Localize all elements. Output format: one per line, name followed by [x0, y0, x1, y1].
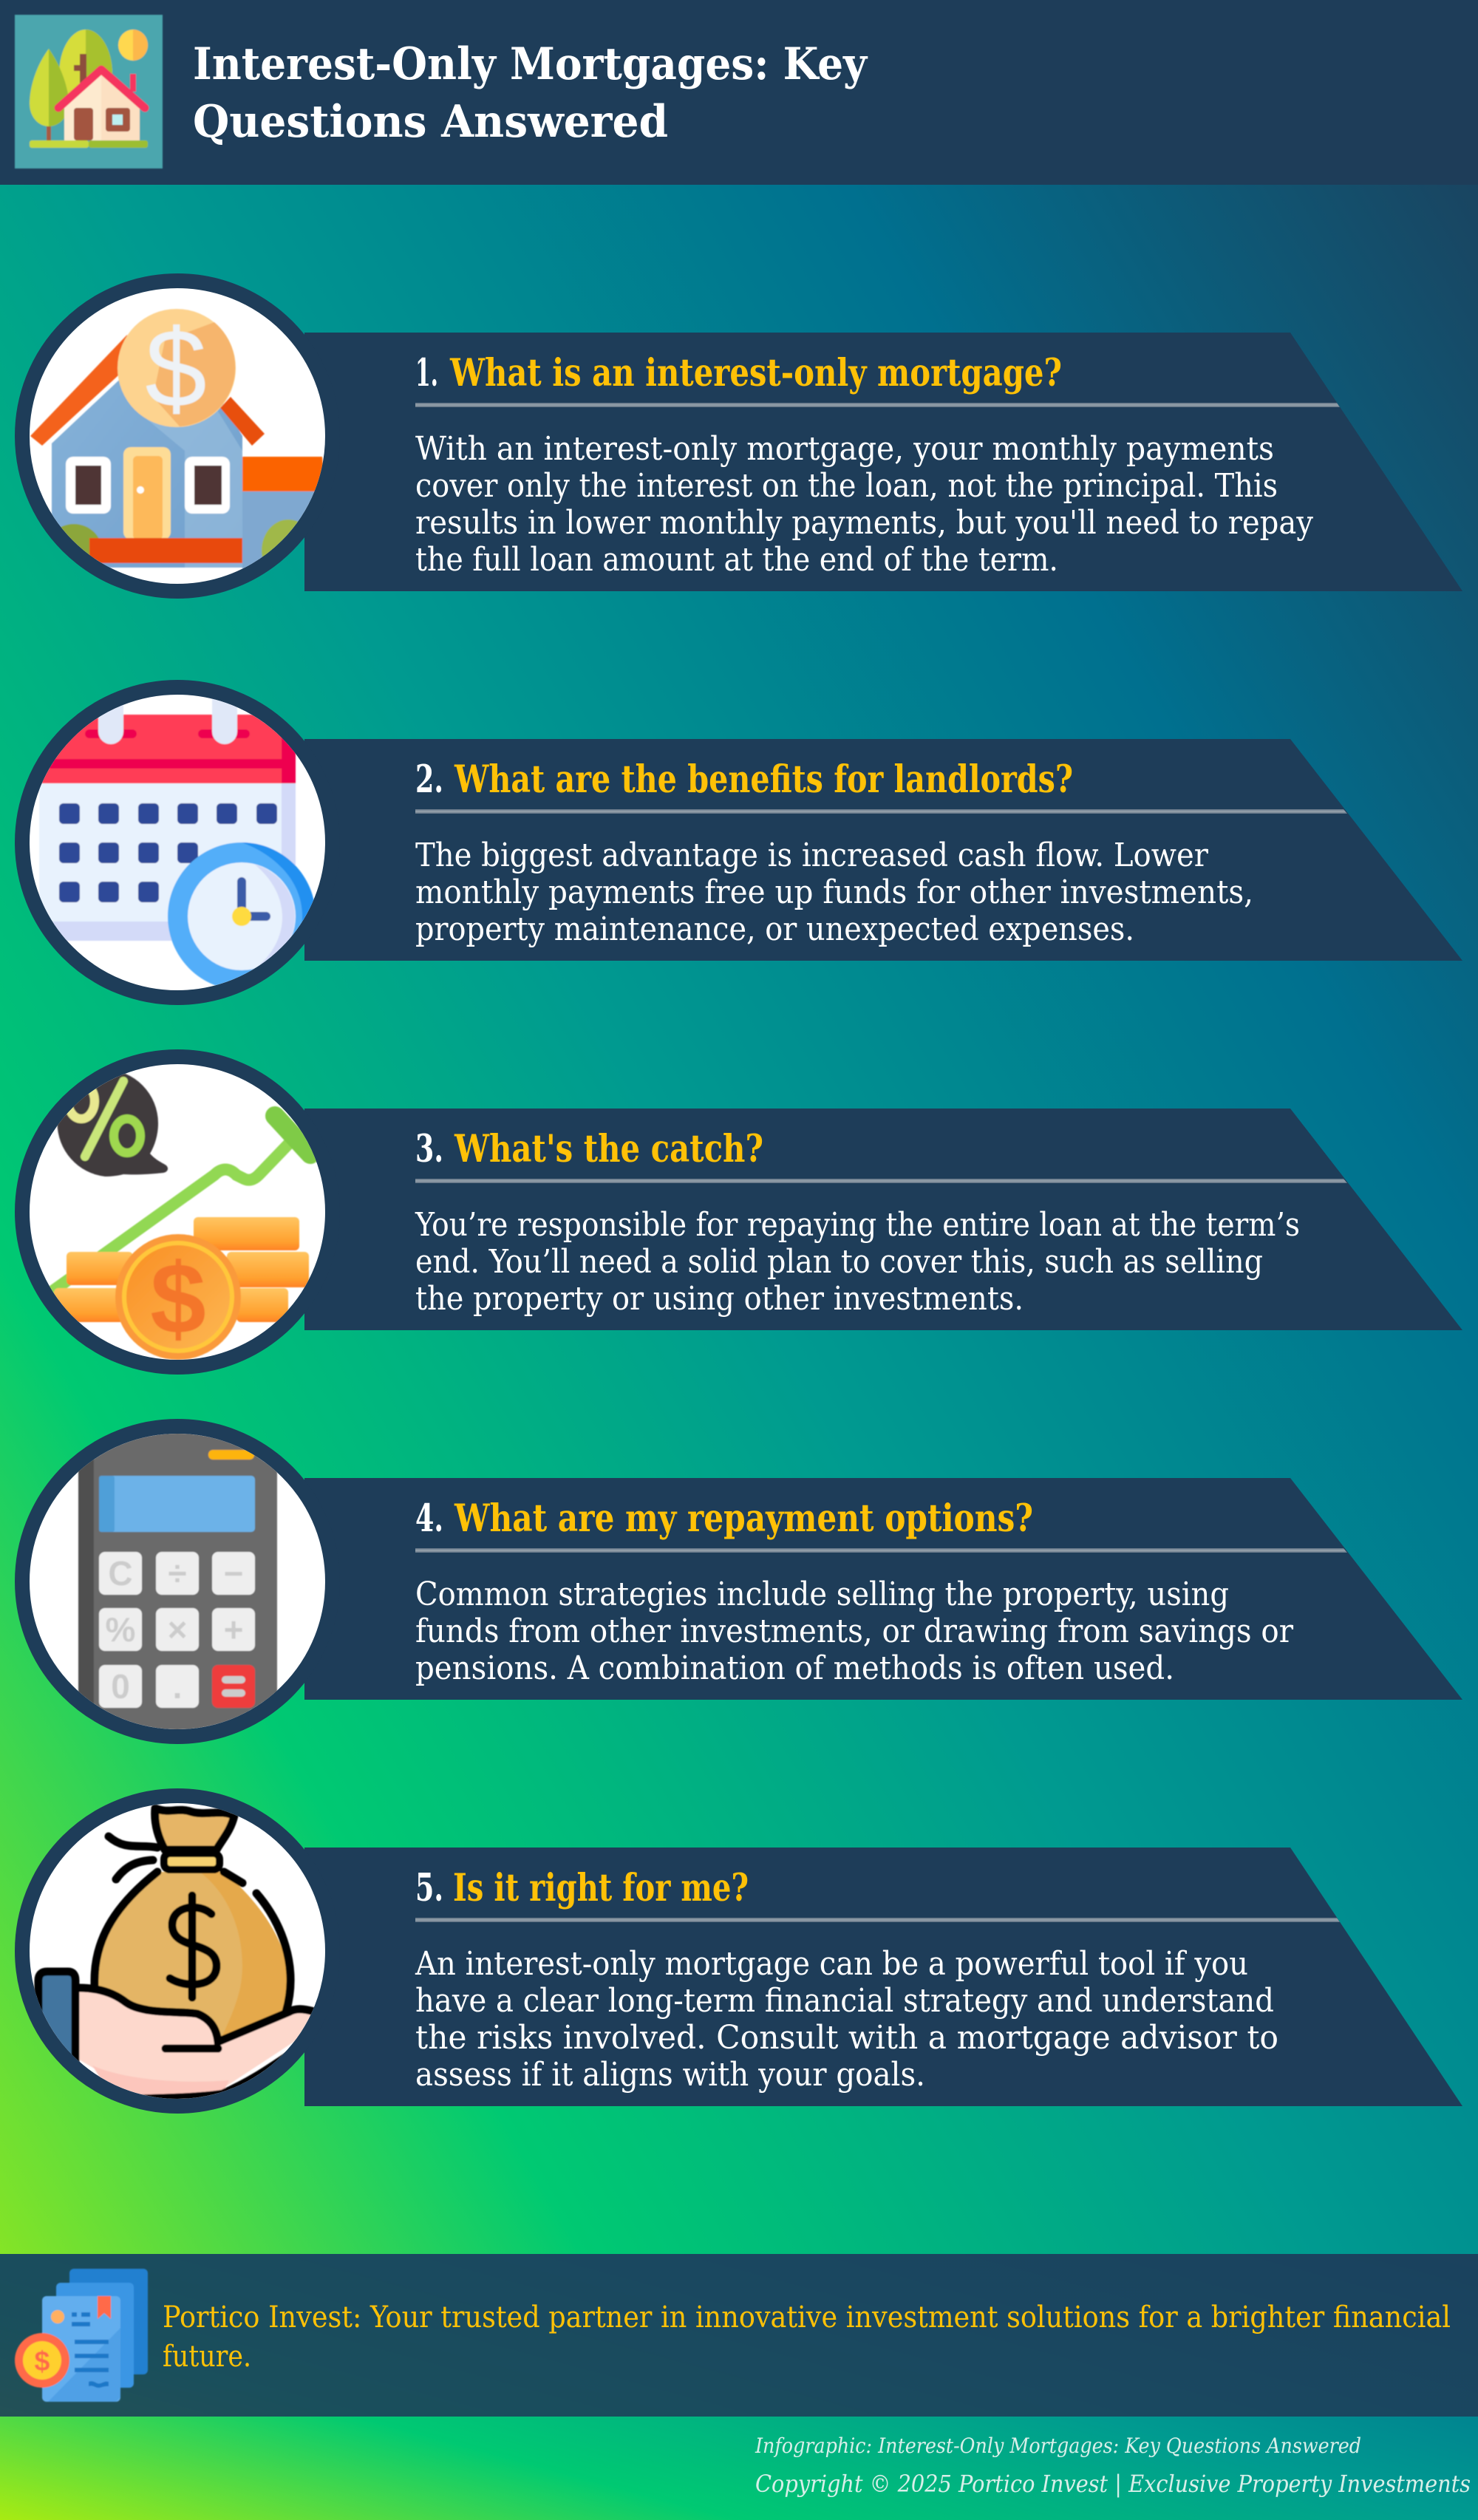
credits: Infographic: Interest-Only Mortgages: Key Questions Answered [755, 2434, 1361, 2458]
footer background gradient [0, 2254, 1478, 2520]
body text: With an interest-only mortgage, your monthly payments [415, 430, 1274, 468]
body text: assess if it aligns with your goals. [415, 2056, 925, 2094]
panel: question 2 [22, 687, 1462, 998]
icon: calculator: − [224, 1554, 243, 1593]
title: Questions Answered [193, 96, 668, 148]
body text: An interest-only mortgage can be a powerful tool if you [415, 1945, 1248, 1983]
icon: documents with coin [15, 2269, 148, 2402]
body text: the property or using other investments. [415, 1280, 1024, 1318]
title: Interest-Only Mortgages: Key [193, 38, 868, 90]
icon: calculator: + [224, 1610, 243, 1649]
icon: house with dollar coin: $ [145, 306, 207, 430]
footer tagline: Portico Invest: Your trusted partner in innovative investment solutions for a brighter financial [163, 2301, 1451, 2335]
body text: funds from other investments, or drawing from savings or [415, 1613, 1293, 1650]
body text [415, 1945, 1278, 2094]
panel: question 1 [22, 281, 1462, 591]
body text: pensions. A combination of methods is often used. [415, 1649, 1174, 1687]
body text [415, 1206, 1300, 1318]
body text: property maintenance, or unexpected expenses. [415, 910, 1134, 948]
icon: calculator: × [168, 1610, 187, 1649]
body text: the risks involved. Consult with a mortgage advisor to [415, 2019, 1278, 2057]
footer tagline: future. [163, 2340, 251, 2374]
icon: money bag in hand [22, 1796, 333, 2106]
divider and heading: 4. [415, 1496, 443, 1541]
icon: coins, growth arrow and percent bubble [22, 1057, 333, 1367]
icon: documents with coin: $ [34, 2346, 50, 2377]
body text [415, 837, 1253, 948]
divider and heading: Is it right for me? [453, 1866, 749, 1910]
icon: coins, growth arrow and percent bubble: $ [150, 1242, 206, 1355]
footer tagline [163, 2301, 1451, 2374]
body text [415, 430, 1314, 579]
icon: house with dollar coin [22, 281, 333, 591]
divider and heading: 3. [415, 1127, 443, 1171]
icon: calculator: ÷ [168, 1554, 187, 1593]
divider and heading [415, 1127, 1347, 1183]
divider and heading: What are my repayment options? [454, 1496, 1033, 1541]
body text: cover only the interest on the loan, not the principal. This [415, 467, 1278, 505]
credits: Copyright © 2025 Portico Invest | Exclusive Property Investments [755, 2470, 1471, 2498]
icon: calculator: 0 [111, 1667, 130, 1706]
panel: question 3 [22, 1057, 1462, 1367]
header bar [0, 0, 1478, 185]
divider and heading: 1. [415, 351, 438, 395]
divider and heading [415, 1496, 1347, 1553]
title [193, 38, 868, 148]
credits [755, 2434, 1471, 2498]
icon: house logo [15, 15, 163, 168]
icon: calculator [22, 1426, 333, 1737]
body text: monthly payments free up funds for other investments, [415, 874, 1253, 911]
divider and heading [415, 351, 1340, 407]
icon: calculator: C [108, 1554, 133, 1593]
divider and heading: 2. [415, 757, 443, 802]
body text: Common strategies include selling the property, using [415, 1576, 1229, 1613]
divider and heading [415, 757, 1347, 814]
body text [415, 1576, 1293, 1687]
divider and heading: What's the catch? [454, 1127, 763, 1171]
panel: question 5 [22, 1796, 1462, 2106]
body text: The biggest advantage is increased cash flow. Lower [415, 837, 1208, 874]
panel: question 4 [22, 1426, 1462, 1737]
divider and heading [415, 1866, 1340, 1922]
divider and heading: What are the benefits for landlords? [454, 757, 1073, 802]
icon: calculator: . [173, 1667, 182, 1706]
body text: have a clear long-term financial strategy and understand [415, 1982, 1274, 2020]
body text: You’re responsible for repaying the entire loan at the term’s [415, 1206, 1300, 1244]
divider and heading: 5. [415, 1866, 443, 1910]
icon: calculator: % [106, 1610, 135, 1649]
body text: results in lower monthly payments, but you'll need to repay [415, 504, 1314, 542]
body text: the full loan amount at the end of the term. [415, 541, 1058, 579]
divider and heading: What is an interest-only mortgage? [449, 351, 1062, 395]
icon: calendar and clock [22, 687, 333, 998]
footer band [0, 2254, 1478, 2417]
body text: end. You’ll need a solid plan to cover this, such as selling [415, 1243, 1263, 1281]
